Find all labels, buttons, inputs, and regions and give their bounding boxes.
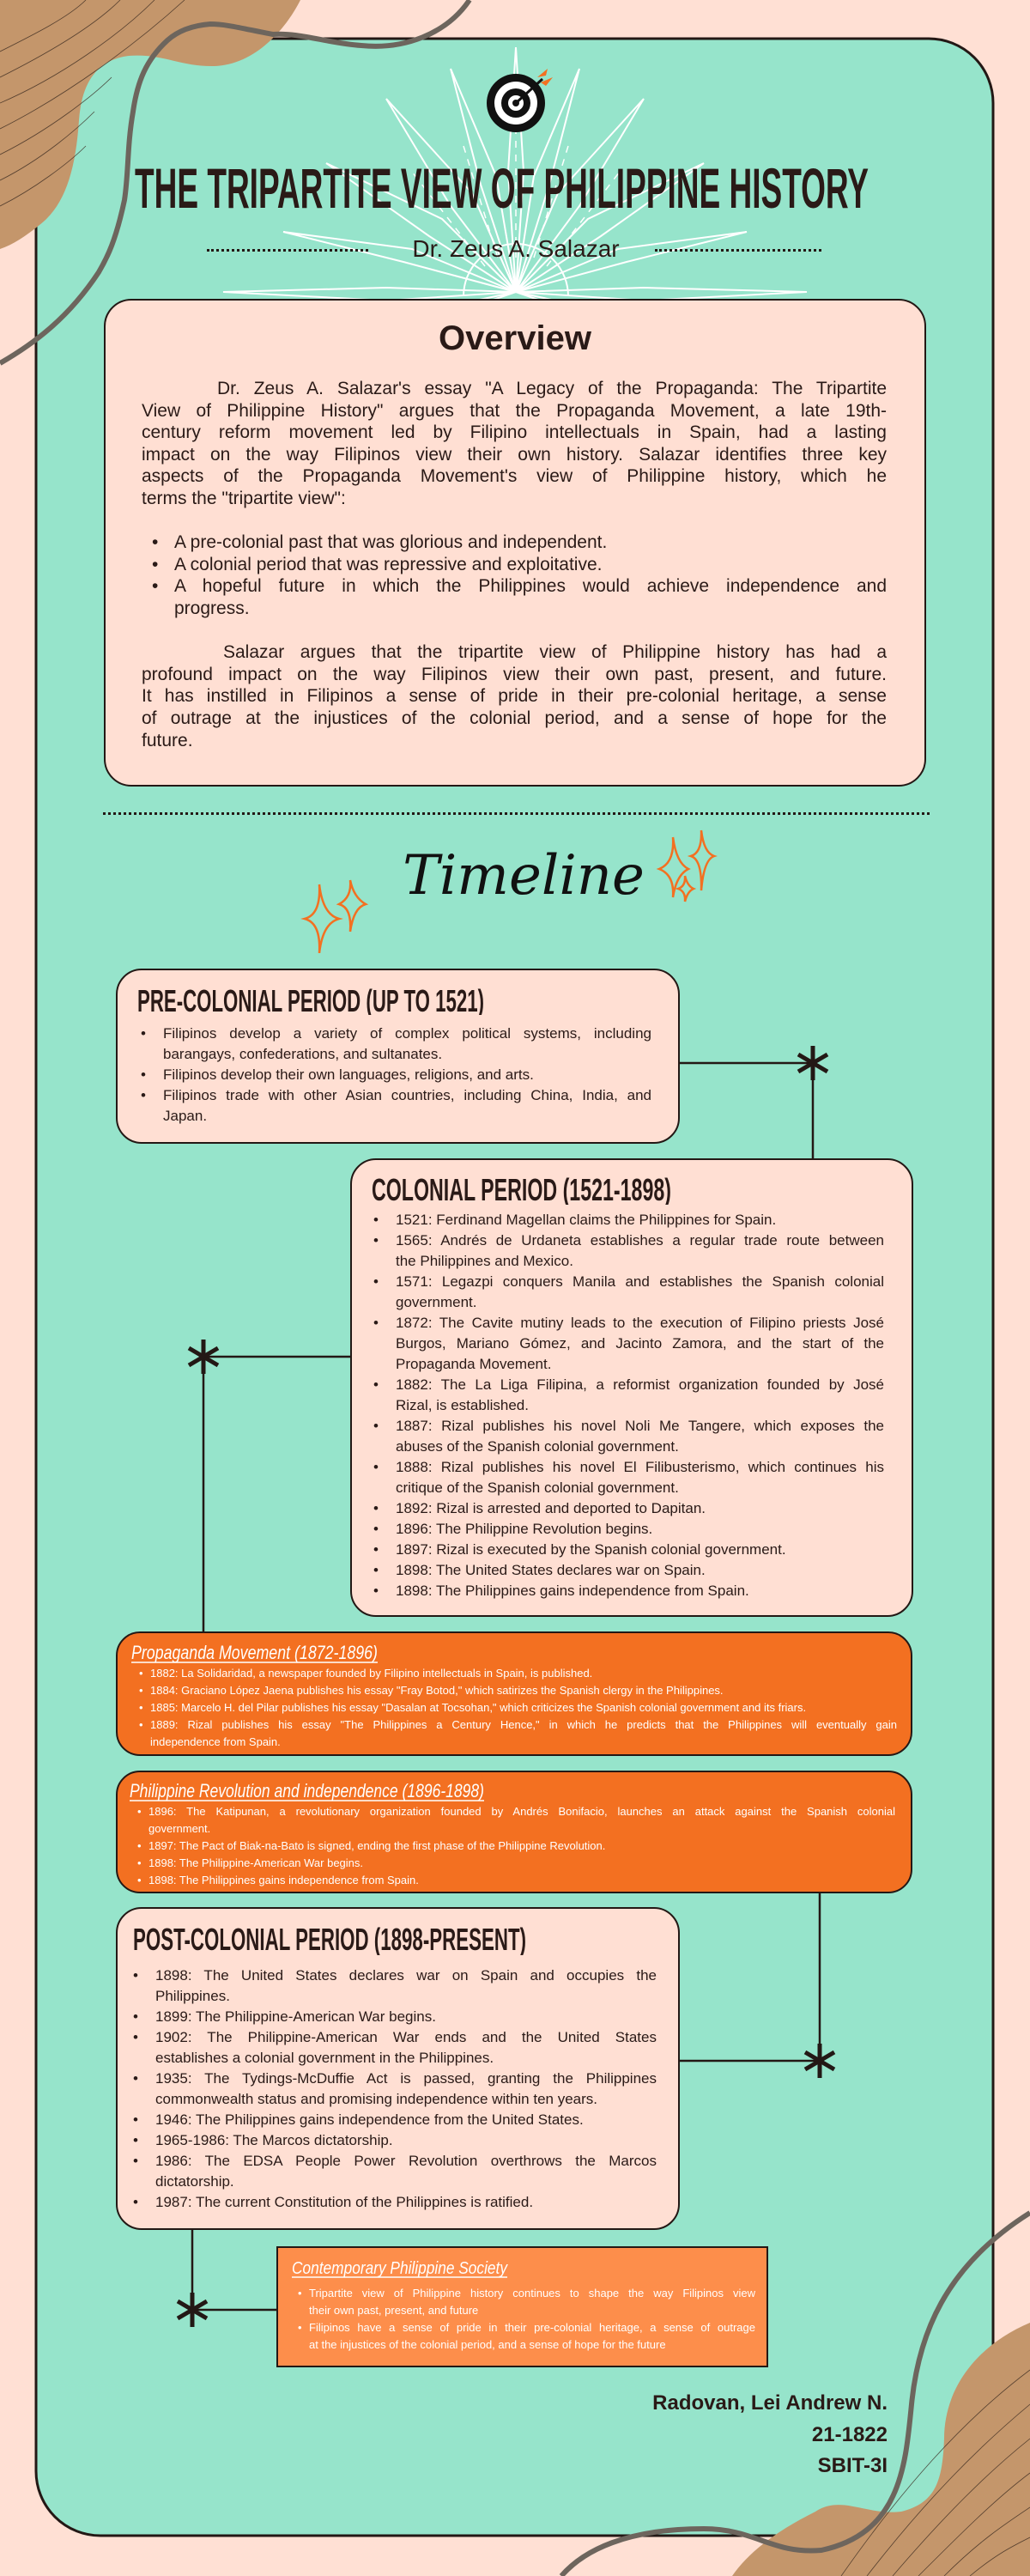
- text block: author: 21-1822: [812, 2423, 888, 2445]
- text block: overview: century reform movement led by Filipino intellectuals in Spain, had a lasting: [142, 422, 887, 442]
- list: pre-colonial: [141, 1025, 651, 1124]
- list: colonial: 1571: Legazpi conquers Manila and establishes the Spanish colonial: [396, 1273, 884, 1290]
- text block: overview: A hopeful future in which the Philippines would achieve independence and: [174, 576, 887, 596]
- list: colonial: Rizal, is established.: [396, 1397, 529, 1413]
- list: revolution: 1898: The Philippines gains independence from Spain.: [148, 1874, 419, 1886]
- list: colonial: 1882: The La Liga Filipina, a reformist organization founded by José: [396, 1376, 884, 1393]
- text block: author: Radovan, Lei Andrew N.: [652, 2391, 888, 2415]
- text block: overview: Salazar argues that the tripartite view of Philippine history has had a: [223, 642, 887, 662]
- icon: target: [487, 69, 553, 132]
- text block: overview: progress.: [174, 598, 250, 618]
- list: propaganda: 1885: Marcelo H. del Pilar publishes his essay "Dasalan at Tocsohan," which criticizes the Spanish colonial government and its friars.: [150, 1701, 806, 1714]
- text block: author: [652, 2391, 888, 2477]
- list: pre-colonial: Filipinos trade with other Asian countries, including China, India, and: [163, 1087, 651, 1103]
- list: colonial: 1888: Rizal publishes his novel El Filibusterismo, which continues his: [396, 1459, 884, 1475]
- text block: overview: It has instilled in Filipinos a sense of pride in their pre-colonial heritage, a sense: [142, 686, 887, 706]
- subtitle: Dr. Zeus A. Salazar: [412, 235, 620, 262]
- list: post-colonial: 1902: The Philippine-American War ends and the United States: [155, 2029, 657, 2045]
- heading: timeline: Timeline: [403, 844, 645, 908]
- list: pre-colonial: Japan.: [163, 1108, 207, 1124]
- list: post-colonial: 1899: The Philippine-American War begins.: [155, 2008, 436, 2025]
- list: colonial: 1898: The Philippines gains independence from Spain.: [396, 1583, 749, 1599]
- list: post-colonial: Philippines.: [155, 1988, 230, 2004]
- list: contemporary: [299, 2287, 755, 2351]
- text block: overview: of outrage at the injustices of the colonial period, and a sense of hope for the: [142, 708, 887, 728]
- bottom-right blob: [732, 2323, 1030, 2576]
- text block: overview: A colonial period that was repressive and exploitative.: [174, 555, 602, 574]
- text block: overview: Dr. Zeus A. Salazar's essay "A Legacy of the Propaganda: The Tripartite: [217, 379, 887, 398]
- list: colonial: [374, 1212, 884, 1599]
- list: revolution: [137, 1805, 895, 1886]
- list: post-colonial: 1946: The Philippines gains independence from the United States.: [155, 2111, 584, 2128]
- subtitle: [207, 235, 821, 262]
- list: post-colonial: [134, 1967, 657, 2210]
- list: post-colonial: 1986: The EDSA People Power Revolution overthrows the Marcos: [155, 2153, 657, 2169]
- list: colonial: Burgos, Mariano Gómez, and Jacinto Zamora, and the start of the: [396, 1335, 884, 1352]
- text block: overview: [142, 379, 888, 750]
- list: colonial: the Philippines and Mexico.: [396, 1253, 573, 1269]
- top-left blob: [0, 0, 300, 249]
- panel: propaganda movement: [116, 1631, 912, 1756]
- text block: overview: impact on the way Filipinos view their own history. Salazar identifies three key: [142, 445, 887, 465]
- list: propaganda: 1884: Graciano López Jaena publishes his essay "Fray Botod," which satirizes the Spanish clergy in the Philippines.: [150, 1684, 724, 1697]
- list: colonial: government.: [396, 1294, 477, 1310]
- list: contemporary: at the injustices of the colonial period, and a sense of hope for the future: [309, 2338, 666, 2351]
- list: post-colonial: dictatorship.: [155, 2173, 234, 2190]
- list: colonial: 1896: The Philippine Revolution begins.: [396, 1521, 652, 1537]
- list: propaganda: [139, 1667, 897, 1748]
- list: colonial: critique of the Spanish colonial government.: [396, 1479, 679, 1496]
- text block: overview: future.: [142, 730, 193, 750]
- list: revolution: 1897: The Pact of Biak-na-Bato is signed, ending the first phase of the Philippine Revolution.: [148, 1839, 605, 1852]
- list: pre-colonial: barangays, confederations, and sultanates.: [163, 1046, 442, 1062]
- list: colonial: 1898: The United States declares war on Spain.: [396, 1562, 706, 1578]
- list: revolution: 1896: The Katipunan, a revolutionary organization founded by Andrés Bonifacio, launches an attack against the Spanish colonial: [148, 1805, 895, 1818]
- list: post-colonial: establishes a colonial government in the Philippines.: [155, 2050, 494, 2066]
- list: post-colonial: 1987: The current Constitution of the Philippines is ratified.: [155, 2194, 533, 2210]
- list: contemporary: their own past, present, and future: [309, 2304, 478, 2317]
- panel: post-colonial period: [116, 1907, 680, 2230]
- list: colonial: 1892: Rizal is arrested and deported to Dapitan.: [396, 1500, 706, 1516]
- heading: timeline: [300, 829, 718, 953]
- heading: overview: Overview: [439, 319, 591, 357]
- list: revolution: government.: [148, 1822, 210, 1835]
- list: contemporary: Filipinos have a sense of pride in their pre-colonial heritage, a sense of outrage: [309, 2321, 755, 2334]
- icon: sparkles: [300, 829, 718, 953]
- panel: philippine revolution: [116, 1771, 912, 1893]
- list: colonial: 1521: Ferdinand Magellan claims the Philippines for Spain.: [396, 1212, 776, 1228]
- panel: colonial period: [350, 1158, 913, 1617]
- text block: overview: terms the "tripartite view":: [142, 489, 346, 508]
- panel: overview: [104, 299, 926, 787]
- list: post-colonial: 1935: The Tydings-McDuffie Act is passed, granting the Philippines: [155, 2070, 657, 2087]
- list: colonial: abuses of the Spanish colonial government.: [396, 1438, 679, 1455]
- list: colonial: Propaganda Movement.: [396, 1356, 551, 1372]
- list: revolution: 1898: The Philippine-American War begins.: [148, 1856, 363, 1869]
- text block: overview: aspects of the Propaganda Movement's view of Philippine history, which he: [142, 466, 887, 486]
- list: pre-colonial: Filipinos develop their own languages, religions, and arts.: [163, 1066, 534, 1083]
- text block: overview: View of Philippine History" argues that the Propaganda Movement, a late 19th-: [142, 401, 887, 421]
- list: propaganda: 1889: Rizal publishes his essay "The Philippines a Century Hence," in which he predicts that the Philippines will eventually gain: [150, 1718, 897, 1731]
- text block: author: SBIT-3I: [818, 2454, 888, 2477]
- list: colonial: 1897: Rizal is executed by the Spanish colonial government.: [396, 1541, 786, 1558]
- list: propaganda: 1882: La Solidaridad, a newspaper founded by Filipino intellectuals in Spain, is published.: [150, 1667, 592, 1680]
- panel: contemporary philippine society: [276, 2246, 768, 2367]
- list: colonial: 1565: Andrés de Urdaneta establishes a regular trade route between: [396, 1232, 884, 1249]
- list: propaganda: independence from Spain.: [150, 1735, 281, 1748]
- list: colonial: 1872: The Cavite mutiny leads to the execution of Filipino priests José: [396, 1315, 884, 1331]
- list: pre-colonial: Filipinos develop a variety of complex political systems, including: [163, 1025, 651, 1042]
- panel: pre-colonial period: [116, 969, 680, 1144]
- list: post-colonial: 1898: The United States declares war on Spain and occupies the: [155, 1967, 657, 1984]
- gray curves: [0, 0, 470, 363]
- list: colonial: 1887: Rizal publishes his novel Noli Me Tangere, which exposes the: [396, 1418, 884, 1434]
- list: post-colonial: commonwealth status and promising independence within ten years.: [155, 2091, 597, 2107]
- list: contemporary: Tripartite view of Philippine history continues to shape the way Filipinos view: [309, 2287, 755, 2300]
- text block: overview: A pre-colonial past that was glorious and independent.: [174, 532, 607, 552]
- list: post-colonial: 1965-1986: The Marcos dictatorship.: [155, 2132, 393, 2148]
- text block: overview: profound impact on the way Filipinos view their own past, present, and future.: [142, 665, 887, 684]
